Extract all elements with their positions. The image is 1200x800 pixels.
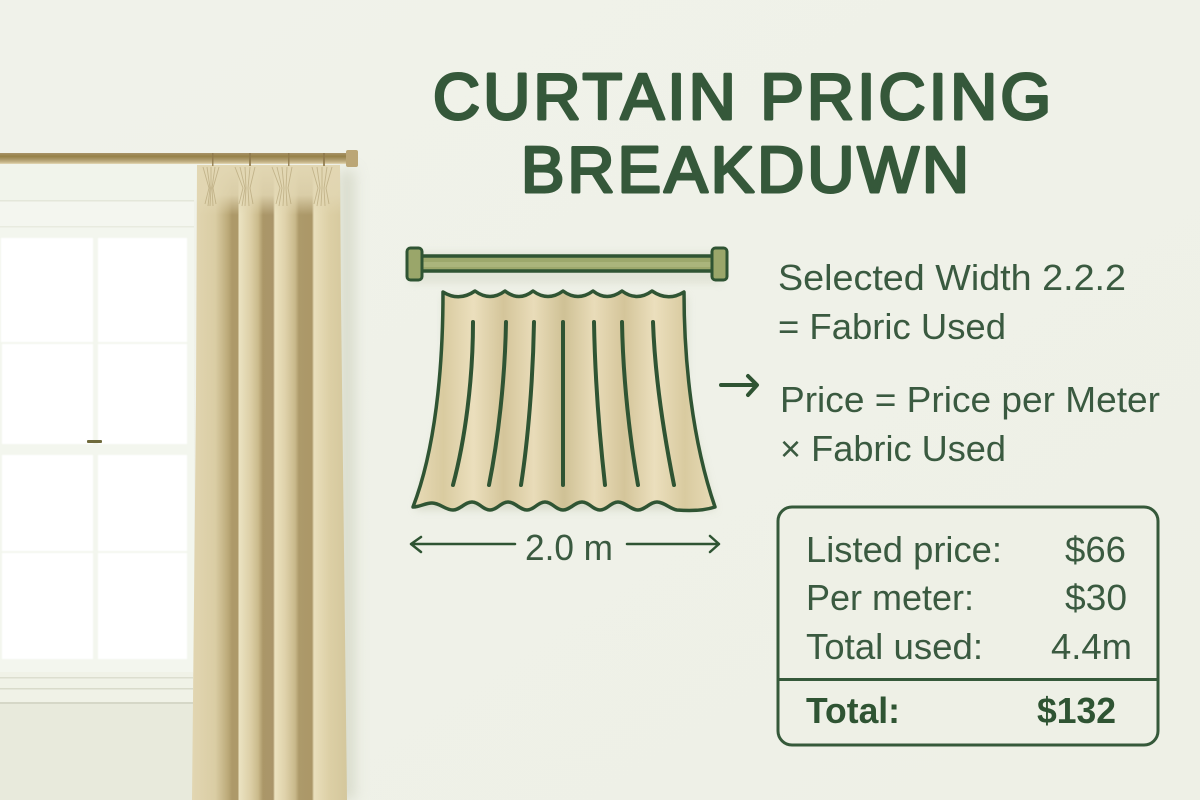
large curtain xyxy=(192,165,354,800)
panel: price summary xyxy=(778,507,1158,745)
formula: price: Price = Price per Meter xyxy=(780,379,1160,420)
row: total used: Total used: xyxy=(806,626,983,667)
title xyxy=(433,60,1051,206)
row: total: $132 xyxy=(1037,690,1116,731)
row: per meter: Per meter: xyxy=(806,577,974,618)
curtain fold lines xyxy=(453,322,674,485)
width dimension: 2.0 m xyxy=(525,527,613,568)
window panes xyxy=(1,238,187,659)
row: total: Total: xyxy=(806,690,900,731)
formula: fabric used: Selected Width 2.2.2 xyxy=(778,257,1126,298)
curtain pleat header xyxy=(203,167,332,206)
title: BREAKDUWN xyxy=(521,133,969,206)
row: total used xyxy=(806,626,1132,667)
formula: fabric used: = Fabric Used xyxy=(778,306,1006,347)
window sill xyxy=(0,672,193,704)
formula: price: × Fabric Used xyxy=(780,428,1006,469)
icon: curtain diagram xyxy=(413,291,715,511)
icon: curtain rod xyxy=(407,248,727,284)
title: CURTAIN PRICING xyxy=(433,60,1051,133)
curtain rod xyxy=(0,150,358,167)
width dimension xyxy=(411,527,719,568)
arrow xyxy=(721,376,757,395)
window latch xyxy=(87,440,102,443)
row: per meter xyxy=(806,577,1127,618)
window xyxy=(0,163,197,800)
formula: fabric used xyxy=(778,257,1126,347)
row: total xyxy=(806,690,1116,731)
row: listed price: $66 xyxy=(1065,529,1126,570)
row: listed price: Listed price: xyxy=(806,529,1002,570)
row: listed price xyxy=(806,529,1126,570)
row: total used: 4.4m xyxy=(1051,626,1132,667)
formula: price xyxy=(780,379,1160,469)
row: per meter: $30 xyxy=(1065,577,1127,618)
